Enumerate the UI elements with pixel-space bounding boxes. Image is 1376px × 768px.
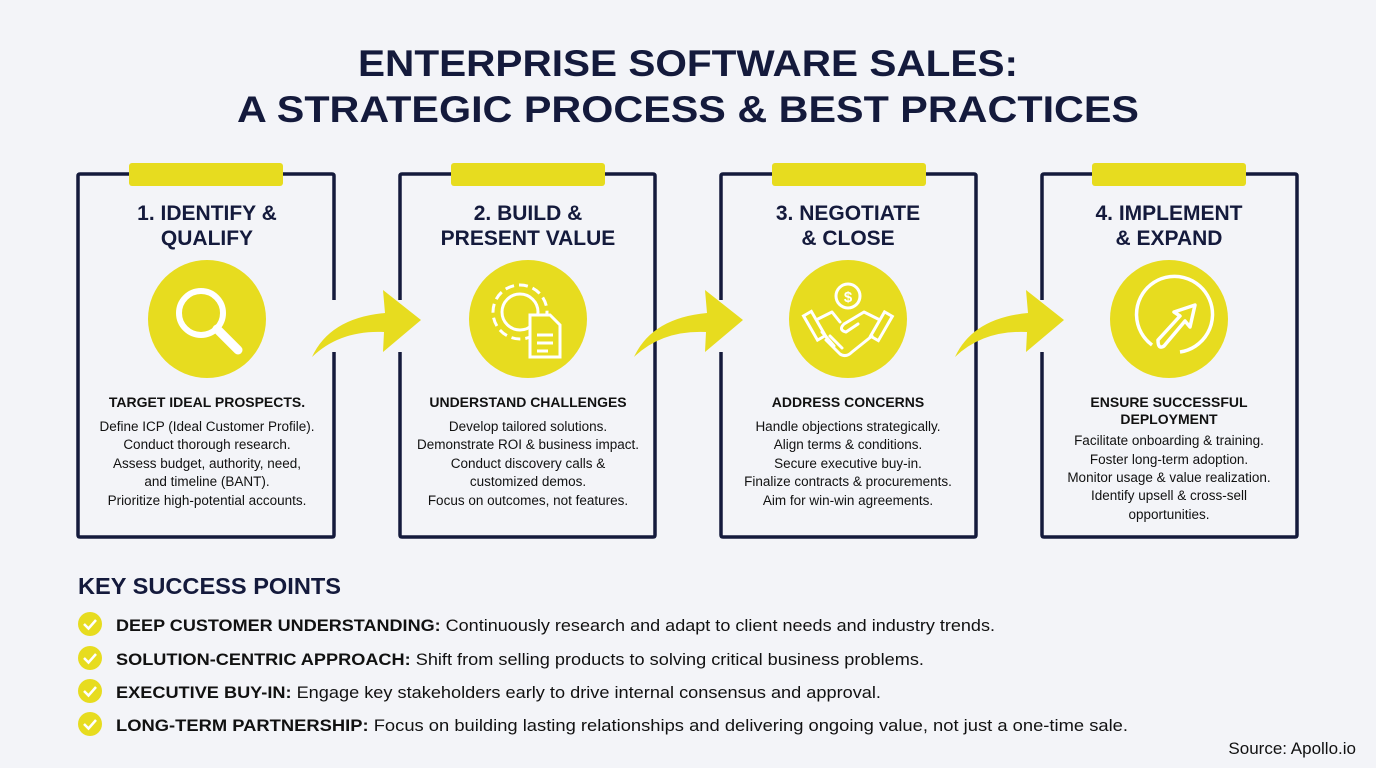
arrow 1 xyxy=(312,290,421,357)
text: build: Focus on outcomes, not features. xyxy=(428,493,628,508)
text: implement xyxy=(1067,394,1271,522)
item 2: SOLUTION-CENTRIC APPROACH: Shift from selling products to solving critical business problems. xyxy=(116,650,924,669)
text: negotiate: Align terms & conditions. xyxy=(774,437,922,452)
item 1: DEEP CUSTOMER UNDERSTANDING: Continuously research and adapt to client needs and industry trends. xyxy=(116,616,995,635)
heading: implement xyxy=(1095,202,1243,250)
text: identify: Conduct thorough research. xyxy=(123,437,291,452)
item 4: LONG-TERM PARTNERSHIP: Focus on building lasting relationships and delivering ongoing value, not just a one-time sale. xyxy=(116,716,1128,735)
text: implement: Facilitate onboarding & training. xyxy=(1074,433,1264,448)
text: negotiate: Aim for win-win agreements. xyxy=(763,493,933,508)
text: identify: and timeline (BANT). xyxy=(144,474,270,489)
panel: 3 negotiate & close xyxy=(721,163,976,537)
arrow 2 xyxy=(634,290,743,357)
heading: identify: QUALIFY xyxy=(161,227,253,250)
panel: 1 identify & qualify xyxy=(78,163,334,537)
icon: magnifier xyxy=(148,260,266,378)
title: A STRATEGIC PROCESS & BEST PRACTICES xyxy=(237,89,1139,130)
heading: build xyxy=(441,202,615,250)
text: identify: Assess budget, authority, need, xyxy=(113,456,301,471)
heading: implement: 4. IMPLEMENT xyxy=(1095,202,1243,225)
text: build xyxy=(417,394,639,508)
text: build: Develop tailored solutions. xyxy=(449,419,607,434)
title xyxy=(237,43,1139,130)
heading: build: PRESENT VALUE xyxy=(441,227,615,250)
heading: identify: 1. IDENTIFY & xyxy=(137,202,277,225)
heading: negotiate xyxy=(776,202,920,250)
arrow 3 xyxy=(955,290,1064,357)
item 3: EXECUTIVE BUY-IN: Engage key stakeholders early to drive internal consensus and approval. xyxy=(116,683,881,702)
heading: negotiate: 3. NEGOTIATE xyxy=(776,202,920,225)
panel: 4 implement & expand xyxy=(1042,163,1297,537)
icon: gear document xyxy=(469,260,587,378)
icon: handshake dollar: $ xyxy=(844,289,853,306)
text: identify: Prioritize high-potential accounts. xyxy=(108,493,306,508)
icon: handshake dollar xyxy=(789,260,907,378)
heading: key success points: KEY SUCCESS POINTS xyxy=(78,573,341,599)
text: identify xyxy=(99,394,315,508)
title: ENTERPRISE SOFTWARE SALES: xyxy=(358,43,1018,84)
text: implement: Foster long-term adoption. xyxy=(1090,452,1248,467)
text: implement: DEPLOYMENT xyxy=(1120,411,1218,427)
source: Source: Apollo.io xyxy=(1228,739,1356,758)
text: implement: ENSURE SUCCESSFUL xyxy=(1090,394,1248,410)
text: implement: opportunities. xyxy=(1128,507,1210,522)
text: negotiate xyxy=(744,394,952,508)
heading: build: 2. BUILD & xyxy=(474,202,582,225)
heading: implement: & EXPAND xyxy=(1116,227,1222,250)
text: negotiate: Finalize contracts & procurements. xyxy=(744,474,952,489)
text: negotiate: Handle objections strategically. xyxy=(755,419,941,434)
text: identify: TARGET IDEAL PROSPECTS. xyxy=(109,394,305,410)
text: build: Conduct discovery calls & xyxy=(451,456,605,471)
text: implement: Identify upsell & cross-sell xyxy=(1091,488,1247,503)
text: identify: Define ICP (Ideal Customer Profile). xyxy=(99,419,315,434)
icon: growth arrow xyxy=(1110,260,1228,378)
text: build: UNDERSTAND CHALLENGES xyxy=(429,394,627,410)
text: build: customized demos. xyxy=(470,474,586,489)
text: negotiate: Secure executive buy-in. xyxy=(774,456,922,471)
list: key success points xyxy=(78,612,1128,736)
heading: identify xyxy=(137,202,277,250)
heading: negotiate: & CLOSE xyxy=(801,227,895,250)
panel: 2 build & present value xyxy=(400,163,655,537)
text: negotiate: ADDRESS CONCERNS xyxy=(772,394,924,410)
text: build: Demonstrate ROI & business impact. xyxy=(417,437,639,452)
text: implement: Monitor usage & value realization. xyxy=(1067,470,1271,485)
